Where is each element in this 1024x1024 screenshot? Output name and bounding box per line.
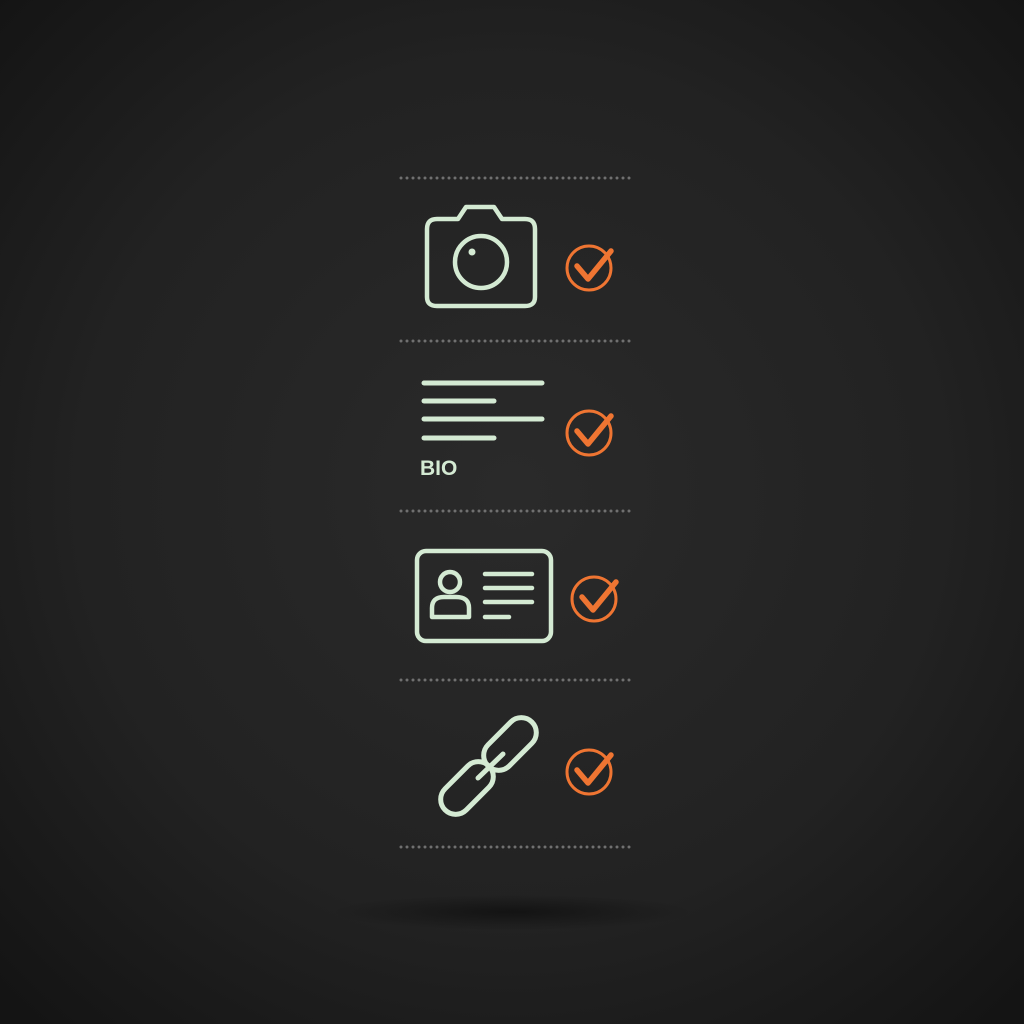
icon: check 1	[567, 246, 611, 290]
icon: chain link	[434, 711, 543, 821]
icon: check 3	[572, 577, 616, 621]
icon: bio text lines	[424, 383, 542, 438]
icon: check 4	[567, 750, 611, 794]
icon: id card	[417, 551, 551, 641]
icon: check 2	[567, 411, 611, 455]
icon: camera	[427, 207, 535, 306]
label: BIO: BIO	[420, 457, 457, 480]
